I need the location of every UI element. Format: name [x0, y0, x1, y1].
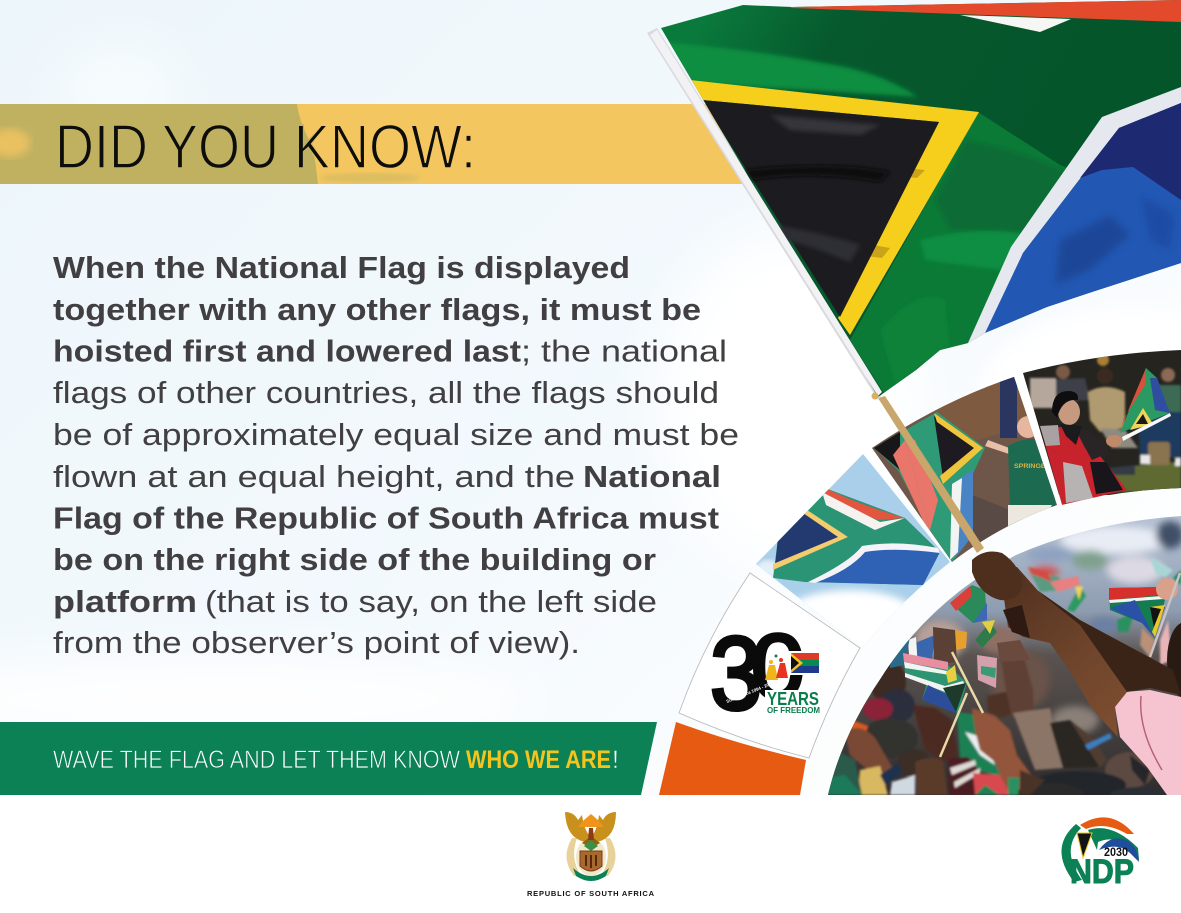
- navy upper blue: [1080, 103, 1181, 200]
- mini flag: [789, 651, 821, 675]
- ring caption: South Africa 1994 - 2024: [726, 680, 775, 704]
- yellow chevron: [690, 80, 979, 335]
- arm and hand holding pole: [972, 552, 1181, 737]
- head of man in shirt: [1167, 622, 1181, 698]
- lower green field: [850, 112, 1098, 395]
- pole ferrule: [872, 392, 878, 400]
- body text block: hoisted first and lowered last: [53, 334, 521, 368]
- body text block: Flag of the Republic of South Africa must: [53, 502, 719, 536]
- body text block: When the National Flag is displayed: [53, 251, 630, 285]
- green footer band: [0, 722, 657, 795]
- yellow shaded folds: [866, 168, 925, 258]
- photo: child with flag: [872, 377, 1057, 562]
- wings: [565, 812, 590, 842]
- body text block: [53, 251, 739, 660]
- dark heads and raised hands: [828, 660, 1154, 795]
- people figures: [765, 654, 788, 680]
- red band: [775, 0, 1181, 22]
- shield: [580, 851, 602, 871]
- white mask behind years lettering: [765, 690, 823, 716]
- tagline: !: [612, 746, 619, 774]
- panel: 30 years logo: [679, 573, 860, 758]
- NDP 2030 logo: [1061, 817, 1139, 891]
- flag pole: [878, 396, 984, 553]
- blurred stadium background: [915, 521, 1181, 734]
- South African flag: [647, 0, 1181, 410]
- photo: crowd waving flags: [820, 510, 1181, 807]
- body text block: flags of other countries, all the flags should: [53, 376, 719, 410]
- small flag: [1120, 368, 1171, 441]
- large red and blue flag: [1109, 587, 1165, 638]
- banner: did you know: [0, 104, 760, 184]
- photo: woman with flag: [1020, 345, 1181, 505]
- tagline: WAVE THE FLAG AND LET THEM KNOW: [53, 746, 460, 774]
- blue field: [985, 103, 1181, 333]
- body text block: from the observer’s point of view).: [53, 626, 580, 660]
- 30 numerals: 0: [751, 616, 805, 718]
- black triangle: [702, 100, 939, 317]
- body text block: together with any other flags, it must be: [53, 293, 701, 327]
- handheld flag: [874, 412, 985, 562]
- bright green fold: [664, 42, 918, 97]
- flag sticks: [940, 573, 1180, 757]
- body text block: (that is to say, on the left side: [205, 585, 657, 619]
- 30 numerals: [710, 616, 805, 732]
- rising sun: [578, 814, 604, 827]
- panel: 30 years logo: OF FREEDOM: [767, 705, 820, 715]
- distant flags: [1028, 557, 1181, 665]
- year: 2030: [1104, 845, 1128, 859]
- pink-striped flag: [903, 653, 967, 713]
- years text: YEARS: [767, 689, 819, 709]
- supporting tusks: [566, 838, 616, 876]
- darker blue folds: [1055, 215, 1130, 285]
- body text block: be of approximately equal size and must be: [53, 418, 739, 452]
- skin hand at flag: [1156, 578, 1178, 600]
- tagline: WHO WE ARE: [466, 746, 611, 774]
- body text block: be on the right side of the building or: [53, 543, 656, 577]
- country name: REPUBLIC OF SOUTH AFRICA: [527, 889, 655, 898]
- hoist strip highlight: [650, 30, 882, 396]
- bird body: [588, 828, 594, 840]
- protea: [584, 840, 598, 851]
- mid crowd flags: [890, 585, 1030, 688]
- body text block: National: [583, 460, 721, 494]
- pink shirt: [1115, 690, 1181, 795]
- waving flag: [773, 488, 940, 585]
- white diagonal band: [968, 87, 1181, 345]
- orange arc segment: [659, 722, 806, 795]
- hoist strip: [647, 28, 884, 400]
- photo: flag against sky: [756, 454, 950, 648]
- heading: DID YOU KNOW:: [55, 113, 476, 182]
- wordmark: NDP: [1070, 853, 1134, 891]
- 30 numerals: 3: [710, 616, 762, 732]
- seated crowd: [1030, 354, 1181, 492]
- inner panel: [576, 838, 606, 876]
- coat of arms: [527, 812, 655, 898]
- body text block: ; the national: [521, 334, 727, 368]
- woman: [1040, 391, 1127, 505]
- child: [985, 416, 1056, 526]
- motto ribbon: [573, 868, 609, 881]
- body text block: flown at an equal height, and the: [53, 460, 575, 494]
- jersey lettering: SPRINGB: [1014, 463, 1046, 470]
- body text block: platform: [53, 585, 197, 619]
- white top wedge: [960, 15, 1071, 32]
